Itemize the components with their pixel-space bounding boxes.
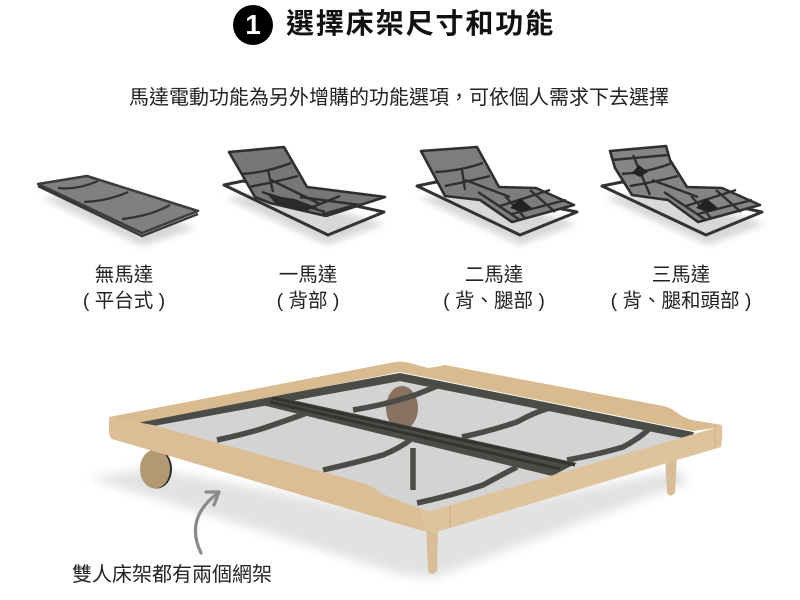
label: three motors [611,264,751,312]
label: two motors: ( 背、腿部 ) [443,290,545,312]
label: two motors [443,264,545,312]
curved arrow [195,492,219,553]
label: no motor [83,264,165,312]
label: one motor [277,264,339,312]
wood seams [450,428,715,528]
option image: three motors [602,146,765,245]
near right rail [420,425,722,533]
label: no motor: ( 平台式 ) [83,290,165,312]
near left rail [109,417,433,532]
leg front [426,525,438,574]
back left wheel [140,450,172,488]
mesh deck [133,373,695,514]
mesh frame [137,377,693,503]
base frame [224,181,384,235]
label: one motor: ( 背部 ) [277,290,339,312]
rear disc [386,386,418,430]
option image: no motor [38,176,198,246]
step badge: 1 [245,9,261,40]
label: three motors: ( 背、腿和頭部 ) [611,290,751,312]
label: one motor: 一馬達 [279,264,337,286]
option image: one motor [224,147,385,245]
caption: 雙人床架都有兩個網架 [72,564,272,586]
leg right [665,455,677,496]
label: three motors: 三馬達 [652,264,710,286]
raised mesh [229,147,385,216]
step badge [233,5,273,45]
bed shadow [90,468,688,578]
option image: two motors [417,147,577,245]
label: two motors: 二馬達 [465,264,523,286]
centre rails [262,395,577,476]
label: no motor: 無馬達 [95,264,153,286]
main bed [90,362,722,578]
subtitle: 馬達電動功能為另外增購的功能選項，可依個人需求下去選擇 [129,87,669,109]
title: 選擇床架尺寸和功能 [286,8,555,39]
far rail top [109,362,722,431]
